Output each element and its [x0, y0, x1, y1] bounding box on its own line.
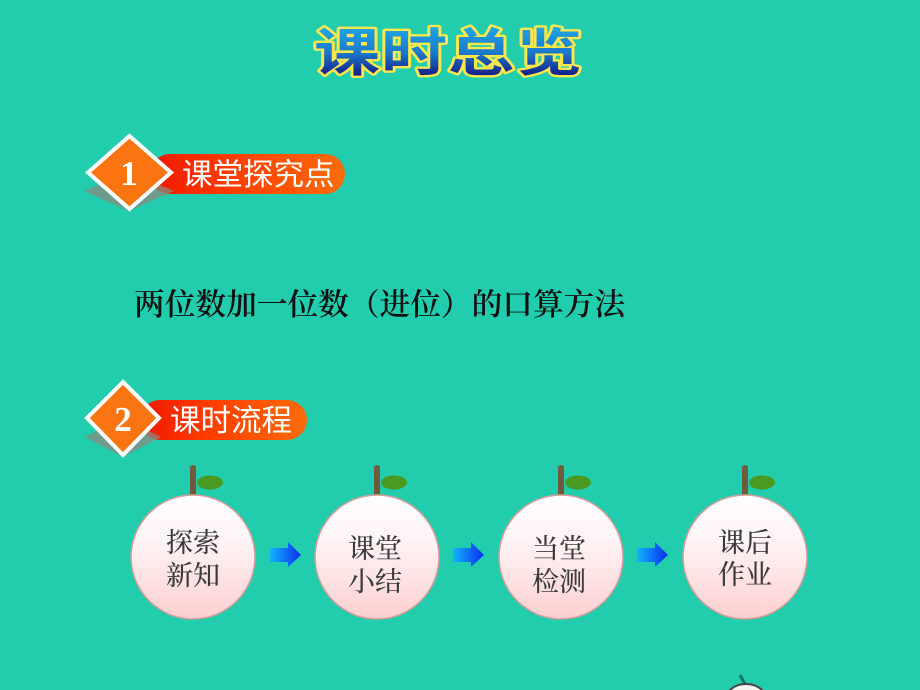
arrow 2 [453, 542, 484, 567]
number 1: 1 [120, 154, 138, 193]
shadow: section 1 diamond [84, 172, 174, 211]
section 1 heading [84, 136, 345, 211]
title: 课 [314, 24, 380, 82]
flow step 3 [499, 465, 623, 619]
flow step 2 [315, 465, 439, 619]
pill: section 2 [140, 400, 307, 440]
title: 总 [448, 24, 514, 82]
pill: section 1 [150, 154, 345, 194]
flow step 1 [131, 465, 255, 619]
section 2 heading [85, 382, 307, 457]
title: 时 [381, 24, 447, 82]
arrow 3 [637, 542, 668, 567]
flow step 1: 探索 [166, 528, 220, 558]
flow step 4: 课后 [718, 528, 772, 558]
flow step 2: 小结 [348, 567, 402, 597]
flow step 4: 作业 [718, 560, 772, 590]
title [314, 24, 582, 82]
flow step 1: 新知 [166, 561, 220, 591]
flow step 3: 检测 [532, 567, 586, 597]
title: 览 [516, 24, 582, 82]
flow step 2: 课堂 [348, 534, 402, 564]
heading text: section 1: 课堂探究点 [182, 158, 334, 192]
body text: 两位数加一位数（进位）的口算方法 [134, 288, 626, 322]
heading text: section 2: 课时流程 [170, 404, 292, 438]
diamond: section 1 [88, 136, 171, 209]
shadow: section 2 diamond [85, 418, 161, 457]
diamond: section 2 [87, 382, 159, 455]
flow step 3: 当堂 [532, 534, 586, 564]
corner figure [726, 675, 766, 690]
arrow 1 [270, 542, 301, 567]
flow step 4 [683, 465, 807, 619]
number 2: 2 [114, 400, 132, 439]
